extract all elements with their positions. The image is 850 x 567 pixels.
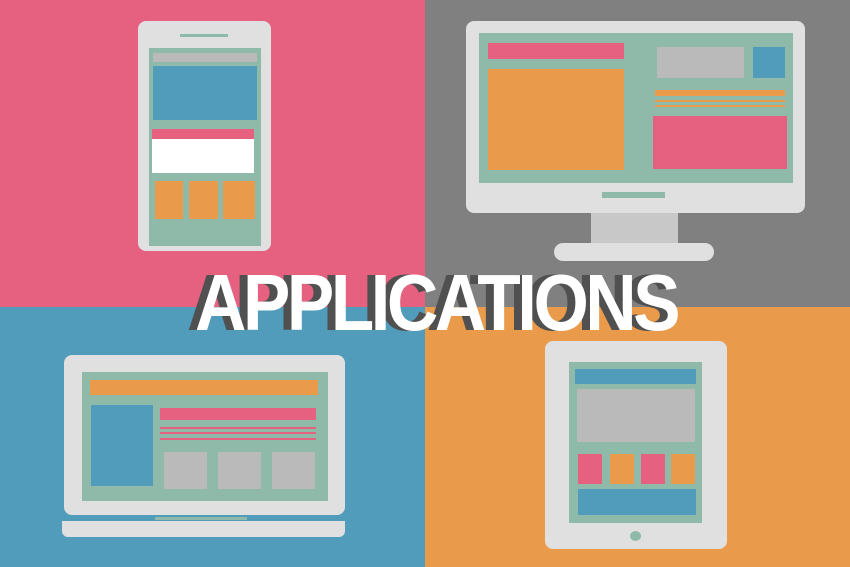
icon: tablet — [545, 341, 727, 549]
background quadrant: pink — [0, 0, 425, 307]
title: APPLICATIONS — [195, 258, 677, 347]
title: APPLICATIONS — [187, 258, 669, 347]
background quadrant: gray — [425, 0, 850, 307]
icon: desktop monitor — [466, 21, 805, 261]
background quadrant: blue — [0, 307, 425, 567]
icon: laptop — [62, 355, 345, 537]
icon: smartphone — [138, 21, 271, 251]
background quadrant: orange — [425, 307, 850, 567]
